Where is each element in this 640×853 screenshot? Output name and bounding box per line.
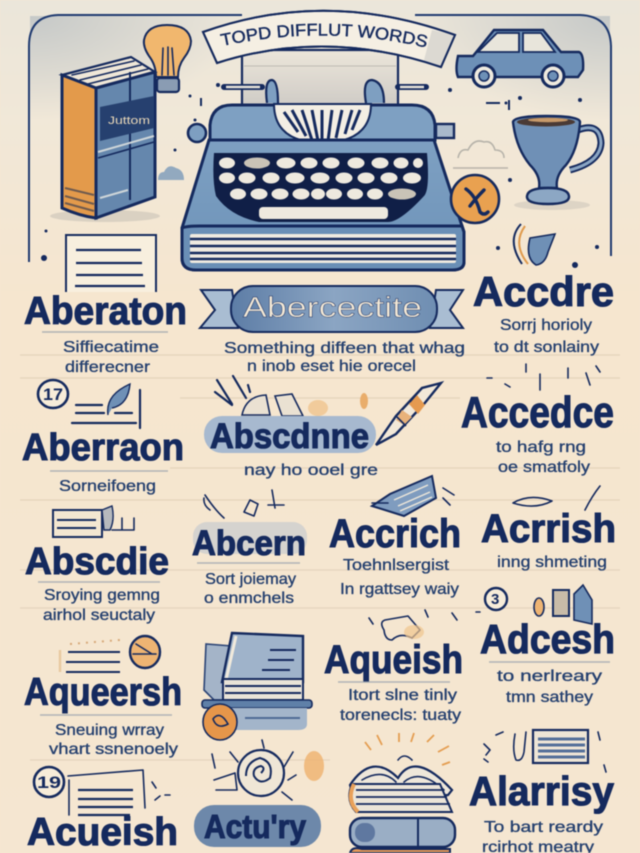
panel: abscdie: Abscdie (25, 541, 169, 583)
panel: acrrish: Acrrish (481, 507, 616, 551)
icon: open book on laptop (202, 633, 312, 740)
icon: orange x badge (451, 175, 499, 223)
panel: aqueersh: Sneuing wrray (55, 722, 164, 739)
banner: title (201, 8, 457, 69)
panel: accedre: Accdre (473, 268, 614, 315)
icon: thick book (50, 57, 160, 222)
panel: alarrisy: Alarrisy (469, 768, 614, 814)
text block: centre definition: Something diffeen that whag (224, 340, 465, 357)
panel: aqueish: Aqueish (324, 638, 463, 682)
panel: aqueish: torenecls: tuaty (340, 707, 461, 724)
icon: frames (534, 585, 592, 624)
panel: abscdie: airhol seuctaly (43, 607, 155, 624)
ribbon banner: Abercectite (243, 292, 422, 324)
number badge 19 (34, 767, 64, 797)
number badge 17 (38, 380, 68, 408)
panel: abcern: Sort joiemay (205, 571, 296, 588)
icon: small window with lines (484, 730, 606, 772)
typewriter (182, 80, 464, 270)
number badge 19: 19 (37, 773, 61, 792)
faint ruled lines (20, 355, 620, 760)
panel: acrrish (481, 486, 616, 571)
icon: note with medallion (60, 636, 160, 672)
panel: adcesh (480, 585, 615, 706)
panel: aqueersh (24, 636, 182, 758)
text block: centre definition: n inob eset hie orecel (247, 358, 416, 375)
panel: aqueish: Itort slne tinly (348, 687, 457, 704)
icon: note (68, 770, 170, 815)
panel: accedce: Accedce (461, 388, 614, 437)
panel: aqueish (324, 610, 480, 724)
icon: note with clip (53, 506, 134, 537)
panel: aqueersh: Aqueersh (24, 671, 182, 714)
icon: open notebook (372, 476, 454, 516)
panel: abcern (192, 490, 307, 607)
panel: accedce: oe smatfoly (498, 459, 590, 476)
panel: accedce: to hafg rng (496, 439, 586, 456)
panel: accrich: Accrich (329, 512, 461, 556)
panel: abcern: o enmchels (204, 590, 294, 607)
scattered specks (41, 83, 599, 268)
panel: aberraon: Aberraon (22, 427, 184, 469)
icon: cup sketch (369, 610, 480, 640)
icon: car (456, 30, 583, 87)
panel: aberration note (24, 235, 187, 376)
panel: adcesh: tmn sathey (506, 689, 593, 706)
ribbon banner (200, 286, 463, 332)
panel: adcesh: Adcesh (480, 616, 615, 662)
panel: accedre: Sorrj horioly (500, 317, 592, 334)
panel: accrich: Toehnlsergist (343, 557, 450, 574)
panel: accedce (461, 364, 614, 476)
panel: acrrish: inng shmeting (497, 554, 607, 571)
icon: sparks (487, 364, 600, 390)
icon: leaf ornament (514, 224, 555, 265)
icon: note (66, 235, 156, 292)
panel: aberration note: differecner (65, 359, 151, 376)
icon: rock sketch (215, 376, 368, 416)
icon: spiral sun (212, 740, 324, 800)
banner: title: TOPD DIFFLUT WORDS (219, 22, 428, 48)
panel: aqueersh: vhart ssnenoely (49, 741, 178, 758)
panel: actury (194, 740, 324, 847)
heading: Aberaton (24, 290, 187, 333)
icon: pen stroke (513, 486, 600, 510)
panel: alarrisy: To bart reardy (484, 819, 603, 836)
typewriter paper (242, 50, 398, 106)
panel: abscdie (25, 506, 169, 624)
panel: acueish (27, 767, 178, 853)
icon: note with quill (72, 384, 140, 428)
panel: abscdnne: Abscdnne (210, 417, 369, 456)
icon: coffee cup (513, 116, 601, 210)
panel: aberration note: Siffiecatime (63, 339, 159, 356)
panel: aberraon (22, 380, 184, 495)
number badge 17: 17 (43, 385, 63, 404)
panel: accedre (473, 268, 614, 356)
panel: aberraon: Sorneifoeng (59, 478, 156, 495)
icon: thick book: Juttom (108, 115, 150, 127)
panel: actury: Actu'ry (204, 808, 307, 845)
icon: light bulb (144, 25, 191, 92)
panel: abscdie: Sroying gemng (44, 587, 160, 604)
panel: abcern: Abcern (192, 524, 306, 563)
panel: accrich (329, 476, 461, 598)
icon: stack of books (349, 733, 455, 853)
icon: blue cloud (158, 166, 184, 180)
page frame (29, 15, 611, 262)
panel: accedre: to dt sonlainy (494, 339, 599, 356)
panel: abscdnne (204, 376, 441, 479)
panel: abscdnne: nay ho ooel gre (244, 462, 378, 479)
icon: pencil (376, 383, 441, 445)
panel: accrich: In rgattsey waiy (340, 581, 459, 598)
icon: leaf and bottle (204, 490, 284, 518)
number badge 3: 3 (491, 591, 499, 608)
panel: acueish: Acueish (27, 811, 178, 853)
panel: adcesh: to nerlreary (497, 668, 602, 685)
text block: centre definition (224, 340, 465, 375)
panel: alarrisy (469, 730, 614, 853)
icon: outline cloud (453, 141, 508, 168)
